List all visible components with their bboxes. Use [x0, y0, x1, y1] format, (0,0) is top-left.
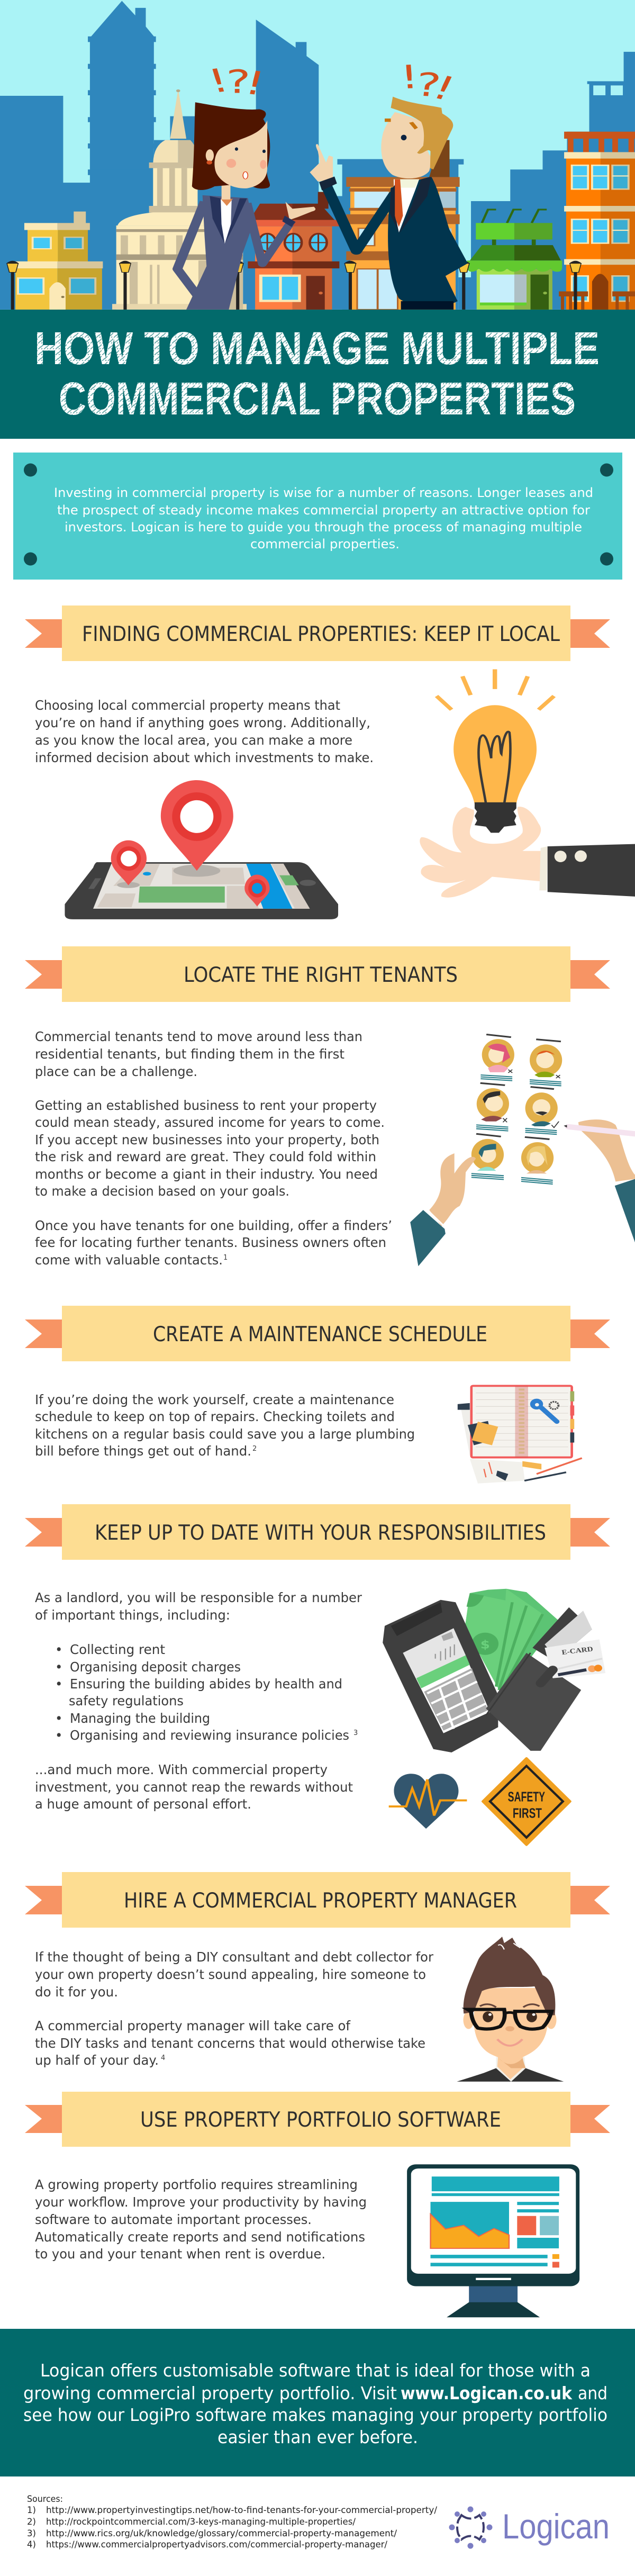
text: locate the right tenants: could mean steady, assured income for years to come. [35, 1115, 385, 1130]
sources list: 4) [27, 2539, 36, 2550]
orange apartment building [559, 132, 635, 310]
icon: computer monitor with dashboard [407, 2164, 579, 2317]
woman with question marks [177, 61, 315, 310]
text: hire a manager: up half of your day. [35, 2053, 159, 2068]
sources list: https://www.commercialpropertyadvisors.com/commercial-property-manager/ [46, 2539, 387, 2550]
cash fan [465, 1589, 559, 1695]
text: finding commercial properties: as you know the local area, you can make a more [35, 733, 352, 748]
text: hire a manager [35, 1949, 434, 2068]
intro text [54, 485, 593, 552]
text: responsibilities: ...and much more. With commercial property [35, 1762, 328, 1777]
sources list: http://rockpointcommercial.com/3-keys-managing-multiple-properties/ [46, 2517, 356, 2527]
title banner [0, 310, 635, 439]
man with question marks: ? [414, 66, 443, 104]
bullet list: Collecting rent [70, 1642, 165, 1657]
wallet and cards [486, 1607, 605, 1751]
intro panel [13, 453, 622, 580]
text: locate the right tenants: 1 [223, 1254, 228, 1262]
bullet list: • [55, 1711, 62, 1726]
call to action text: growing commercial property portfolio. Visit [23, 2383, 397, 2403]
text: locate the right tenants: come with valuable contacts. [35, 1252, 223, 1268]
call to action text: and [578, 2383, 607, 2403]
sources list: Sources: [27, 2494, 63, 2504]
text: locate the right tenants: Once you have tenants for one building, offer a finders’ [35, 1218, 392, 1233]
call to action text: Logican offers customisable software that is ideal for those with a [40, 2360, 591, 2381]
heading ribbon: hire a manager: HIRE A COMMERCIAL PROPERTY MANAGER [124, 1889, 517, 1913]
bullet list: safety regulations [69, 1693, 184, 1709]
man with question marks: ! [427, 68, 461, 108]
icon: notebook with wrench and stationery [458, 1386, 582, 1484]
card terminal [383, 1600, 498, 1752]
heading ribbon: keep up to date: KEEP UP TO DATE WITH YOUR RESPONSIBILITIES [95, 1521, 546, 1545]
heading ribbon: finding commercial properties [25, 605, 610, 661]
heading ribbon: finding commercial properties: FINDING COMMERCIAL PROPERTIES: KEEP IT LOCAL [82, 622, 560, 646]
sources list: 3) [27, 2528, 36, 2538]
icon: heart with heartbeat line [389, 1774, 467, 1829]
intro text: commercial properties. [250, 537, 400, 552]
woman with question marks: ! [241, 64, 269, 103]
green shop [467, 210, 562, 310]
call to action band [0, 2329, 635, 2476]
heading ribbon: portfolio software [25, 2092, 610, 2147]
icon: manager portrait with glasses [457, 1937, 564, 2082]
text: hire a manager: 4 [161, 2054, 165, 2062]
text: hire a manager: A commercial property manager will take care of [35, 2018, 351, 2033]
text: locate the right tenants: months or become a giant in their industry. You need [35, 1167, 378, 1182]
bullet list: • [55, 1676, 62, 1692]
left hand with sleeve [410, 1153, 476, 1266]
heading ribbon: hire a manager [25, 1872, 610, 1928]
heading ribbon: portfolio software: USE PROPERTY PORTFOLIO SOFTWARE [140, 2108, 501, 2132]
text: create a maintenance schedule: 2 [252, 1445, 257, 1453]
text: portfolio software: to you and your tenant when rent is overdue. [35, 2246, 325, 2262]
text: finding commercial properties [35, 698, 374, 765]
heading ribbon: locate the right tenants: LOCATE THE RIGHT TENANTS [184, 963, 458, 987]
bullet list: • [55, 1642, 62, 1657]
text: create a maintenance schedule: bill before things get out of hand. [35, 1443, 251, 1459]
cash fan: $ [480, 1638, 490, 1651]
icon: safety first sign: SAFETY [508, 1789, 545, 1804]
text: finding commercial properties: Choosing local commercial property means that [35, 698, 340, 713]
text: locate the right tenants: residential tenants, but finding them in the first [35, 1046, 344, 1062]
sources list: 1) [27, 2505, 36, 2515]
text: portfolio software: Automatically create reports and send notifications [35, 2229, 365, 2245]
icon: safety first sign [483, 1758, 570, 1845]
text: locate the right tenants: Getting an established business to rent your property [35, 1098, 377, 1113]
tall orange building behind man [346, 140, 460, 310]
bullet list: • [55, 1659, 62, 1675]
heading ribbon: create a maintenance schedule: CREATE A MAINTENANCE SCHEDULE [153, 1323, 487, 1346]
sources list: http://www.rics.org/uk/knowledge/glossary/commercial-property-management/ [46, 2528, 397, 2538]
yellow house [15, 212, 103, 310]
woman with question marks: ? [226, 63, 251, 101]
logo: Logican [449, 2507, 610, 2549]
bullet list [55, 1642, 358, 1743]
six tenant portraits [471, 1034, 562, 1184]
text: portfolio software: A growing property portfolio requires streamlining [35, 2177, 358, 2192]
icon: hand holding light bulb [420, 670, 635, 898]
intro text: Investing in commercial property is wise for a number of reasons. Longer leases and [54, 485, 593, 500]
right hand with pen [564, 1119, 635, 1242]
capitol building [112, 89, 247, 310]
call to action text: www.Logican.co.uk [401, 2383, 573, 2403]
bullet list: Managing the building [70, 1711, 210, 1726]
text: hire a manager: the DIY tasks and tenant concerns that would otherwise take [35, 2036, 425, 2051]
text: responsibilities: As a landlord, you will be responsible for a number [35, 1590, 362, 1605]
text: finding commercial properties: you’re on hand if anything goes wrong. Additionally, [35, 715, 370, 730]
bullet list: Organising and reviewing insurance policies [70, 1728, 349, 1743]
text: responsibilities [35, 1590, 362, 1812]
call to action text: easier than ever before. [217, 2427, 418, 2447]
text: portfolio software: your workflow. Improve your productivity by having [35, 2194, 367, 2210]
bullet list: • [55, 1728, 62, 1743]
text: locate the right tenants: the risk and reward are great. They could fold within [35, 1149, 376, 1164]
sources list [27, 2494, 437, 2550]
text: responsibilities: of important things, including: [35, 1607, 230, 1623]
text: create a maintenance schedule [35, 1392, 415, 1459]
orange brick house [245, 192, 339, 310]
text: responsibilities: investment, you cannot reap the rewards without [35, 1779, 353, 1795]
sources list: 2) [27, 2517, 36, 2527]
icon: phone map with location pins [65, 780, 338, 919]
text: responsibilities: a huge amount of personal effort. [35, 1796, 251, 1812]
heading ribbon: create a maintenance schedule [25, 1306, 610, 1361]
skyline silhouettes [0, 1, 635, 310]
text: portfolio software: software to automate important processes. [35, 2212, 312, 2227]
text: locate the right tenants [35, 1029, 392, 1268]
logo emblem [449, 2507, 492, 2549]
bullet list: Organising deposit charges [70, 1659, 241, 1675]
text: locate the right tenants: If you accept new businesses into your property, both [35, 1132, 379, 1147]
text: hire a manager: do it for you. [35, 1984, 118, 2000]
text: locate the right tenants: Commercial tenants tend to move around less than [35, 1029, 362, 1044]
icon: hands choosing tenant profiles [410, 1034, 635, 1266]
man with question marks: ! [398, 58, 420, 96]
heading ribbon: locate the right tenants [25, 946, 610, 1002]
text: locate the right tenants: to make a decision based on your goals. [35, 1183, 289, 1199]
man with question marks [310, 58, 468, 310]
intro text: the prospect of steady income makes commercial property an attractive option for [57, 503, 590, 518]
bullet list: 3 [353, 1729, 358, 1737]
bullet list: Ensuring the building abides by health and [70, 1676, 342, 1692]
heading ribbon: keep up to date [25, 1504, 610, 1560]
hero illustration: city skyline with two people [0, 0, 635, 310]
wallet and cards: E-CARD [561, 1645, 594, 1657]
icon: card terminal, cash and wallet [383, 1589, 605, 1752]
text: portfolio software [35, 2177, 367, 2262]
text: hire a manager: your own property doesn’t sound appealing, hire someone to [35, 1967, 426, 1982]
title text [34, 323, 600, 424]
street lamps [6, 261, 582, 310]
sources list: http://www.propertyinvestingtips.net/how-to-find-tenants-for-your-commercial-property/ [46, 2505, 437, 2515]
text: finding commercial properties: informed decision about which investments to make. [35, 750, 374, 765]
woman with question marks: ! [204, 61, 233, 101]
intro text: investors. Logican is here to guide you through the process of managing multiple [65, 520, 582, 535]
text: create a maintenance schedule: kitchens on a regular basis could save you a large plumbing [35, 1426, 415, 1442]
text: hire a manager: If the thought of being a DIY consultant and debt collector for [35, 1949, 434, 1965]
text: locate the right tenants: place can be a challenge. [35, 1064, 197, 1079]
logo: Logican: Logican [502, 2507, 610, 2546]
call to action text [23, 2360, 607, 2447]
text: locate the right tenants: fee for locating further tenants. Business owners often [35, 1235, 386, 1250]
icon: safety first sign: FIRST [513, 1805, 542, 1821]
text: create a maintenance schedule: If you’re doing the work yourself, create a maintenance [35, 1392, 394, 1407]
call to action text: see how our LogiPro software makes managing your property portfolio [23, 2405, 607, 2425]
text: create a maintenance schedule: schedule to keep on top of repairs. Checking toilets and [35, 1409, 395, 1424]
